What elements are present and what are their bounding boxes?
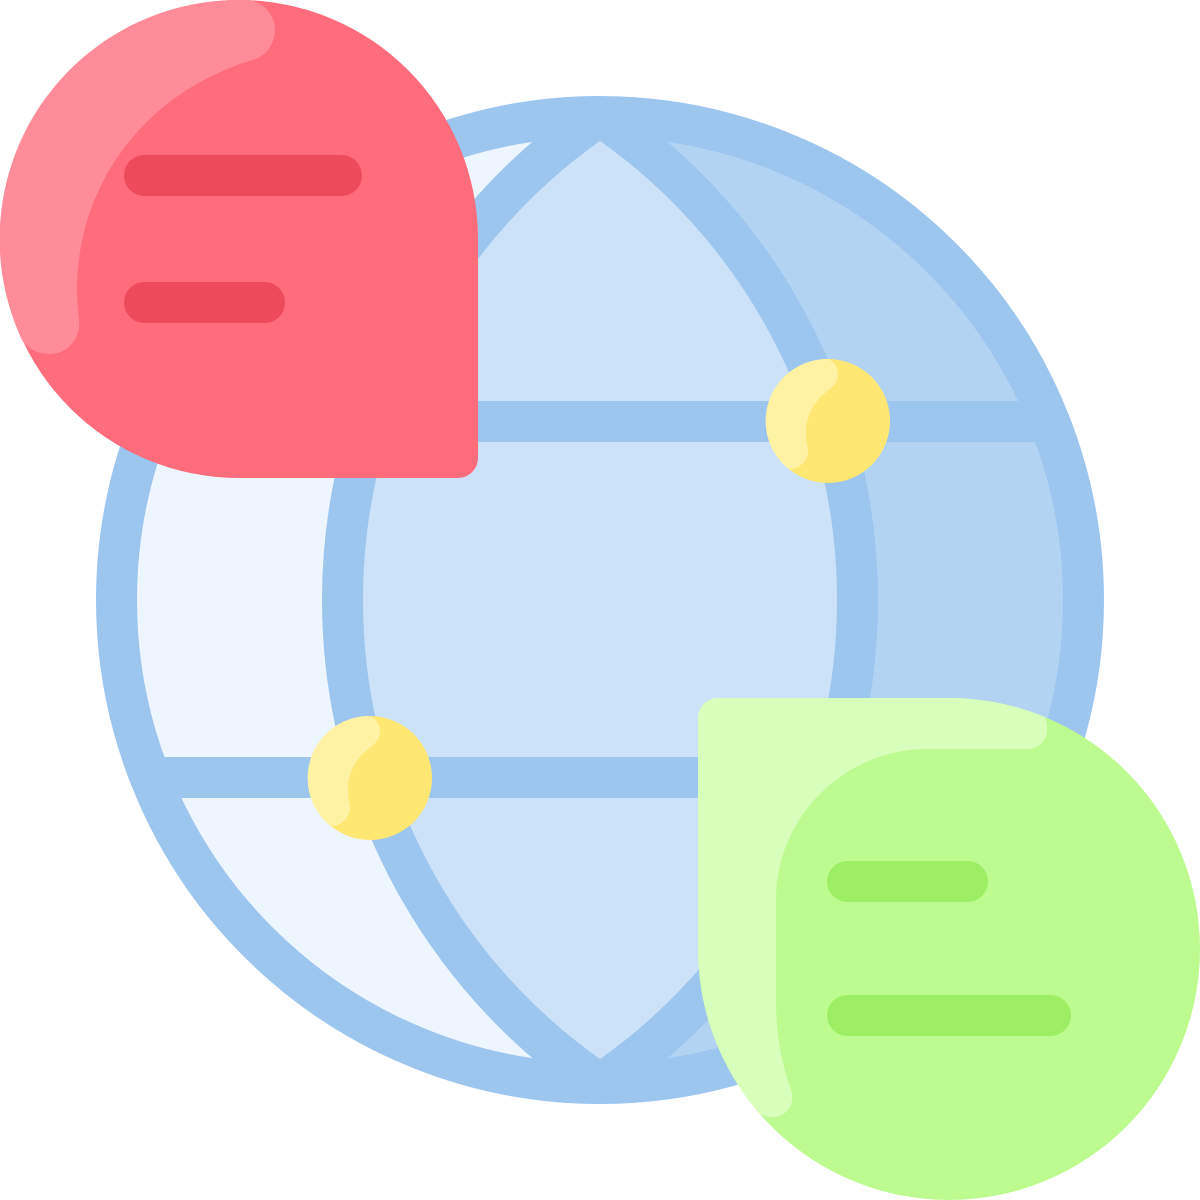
green speech bubble — [698, 698, 1200, 1200]
globe latitude lines — [164, 401, 1035, 798]
globe outer ring — [116, 116, 1084, 1084]
red speech bubble — [0, 0, 478, 478]
red bubble text line 2 — [124, 282, 285, 323]
globe centre lens fill — [342, 116, 858, 1084]
globe left fill — [120, 120, 600, 1080]
red bubble highlight — [0, 0, 275, 354]
green bubble text line 2 — [827, 995, 1071, 1036]
node: upper right — [766, 359, 890, 483]
globe right fill — [600, 120, 1080, 1080]
globe meridian lens — [342, 116, 858, 1084]
red bubble text line 1 — [124, 155, 362, 196]
globe — [90, 116, 1110, 1084]
green bubble highlight — [698, 698, 1047, 1117]
green bubble text line 1 — [827, 861, 988, 902]
node: lower left — [308, 716, 432, 840]
